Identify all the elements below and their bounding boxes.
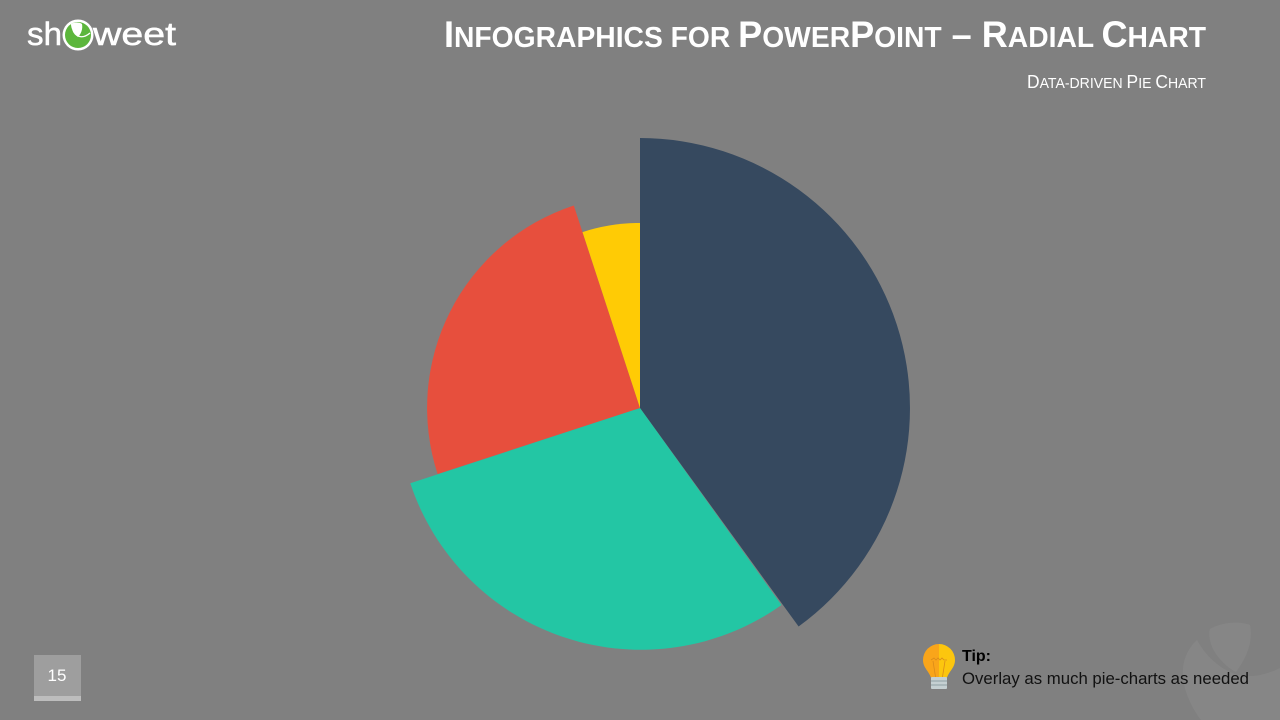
title: INFOGRAPHICS FOR POWERPOINT – RADIAL CHART bbox=[444, 14, 1206, 55]
icon: light bulb bbox=[923, 644, 955, 689]
tip text: Tip: bbox=[962, 648, 991, 665]
logo: showeet: sh bbox=[27, 16, 62, 52]
logo: showeet: weet bbox=[92, 16, 176, 52]
tip text bbox=[962, 648, 1249, 688]
logo: showeet bbox=[27, 16, 176, 52]
radial pie chart bbox=[410, 138, 910, 650]
slice: red bbox=[427, 206, 640, 474]
subtitle: DATA-DRIVEN PIE CHART bbox=[1027, 72, 1206, 92]
page number box: 15 bbox=[48, 666, 66, 685]
watermark logo bbox=[1183, 623, 1280, 720]
slice: yellow bbox=[582, 223, 640, 408]
slice: navy bbox=[640, 138, 910, 626]
page number box bbox=[34, 655, 81, 701]
slice: teal bbox=[410, 408, 782, 650]
tip text: Overlay as much pie-charts as needed bbox=[962, 669, 1249, 688]
